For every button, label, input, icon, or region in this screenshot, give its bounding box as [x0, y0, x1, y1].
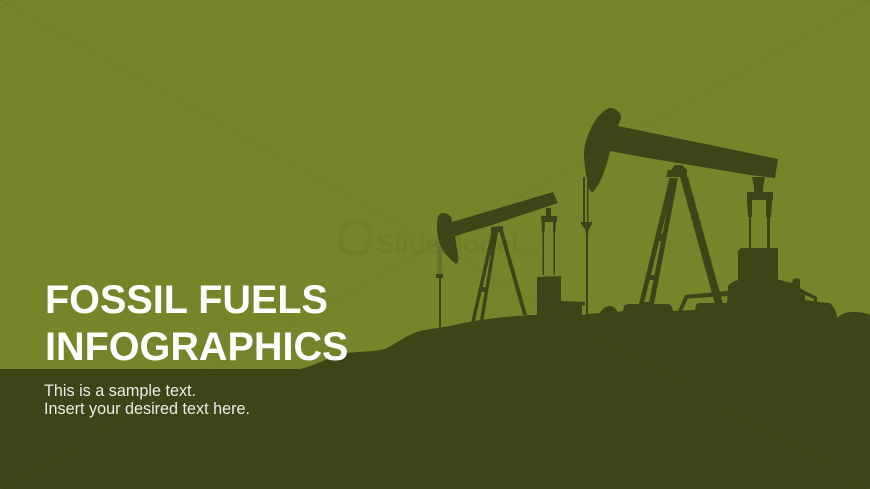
guard rail — [678, 291, 817, 311]
walking beam and horsehead — [437, 192, 558, 264]
subtitle text: Insert your desired text here. — [44, 400, 250, 418]
rear leg — [680, 177, 723, 304]
pitman and hanger — [541, 208, 557, 275]
polished rod — [581, 177, 592, 315]
walking beam and horsehead — [584, 108, 778, 192]
ground silhouette — [0, 278, 870, 489]
gearbox — [537, 276, 585, 316]
oil pump: large — [581, 108, 817, 315]
title — [45, 278, 348, 369]
subtitle text — [44, 382, 250, 418]
watermark: SlideModel.com — [376, 229, 538, 259]
title: FOSSIL FUELS — [45, 278, 328, 322]
samson bearing — [666, 165, 687, 177]
polished rod — [436, 274, 443, 327]
samson bearing — [491, 226, 503, 233]
title: INFOGRAPHICS — [45, 325, 348, 369]
front leg with ladder rails — [471, 232, 498, 323]
subtitle text: This is a sample text. — [44, 382, 196, 400]
pitman and hanger — [747, 177, 773, 248]
watermark — [341, 222, 538, 259]
front leg with ladder rails — [639, 178, 678, 304]
gearbox — [738, 248, 778, 285]
rear leg — [499, 230, 527, 315]
oil pump: small — [436, 192, 585, 327]
